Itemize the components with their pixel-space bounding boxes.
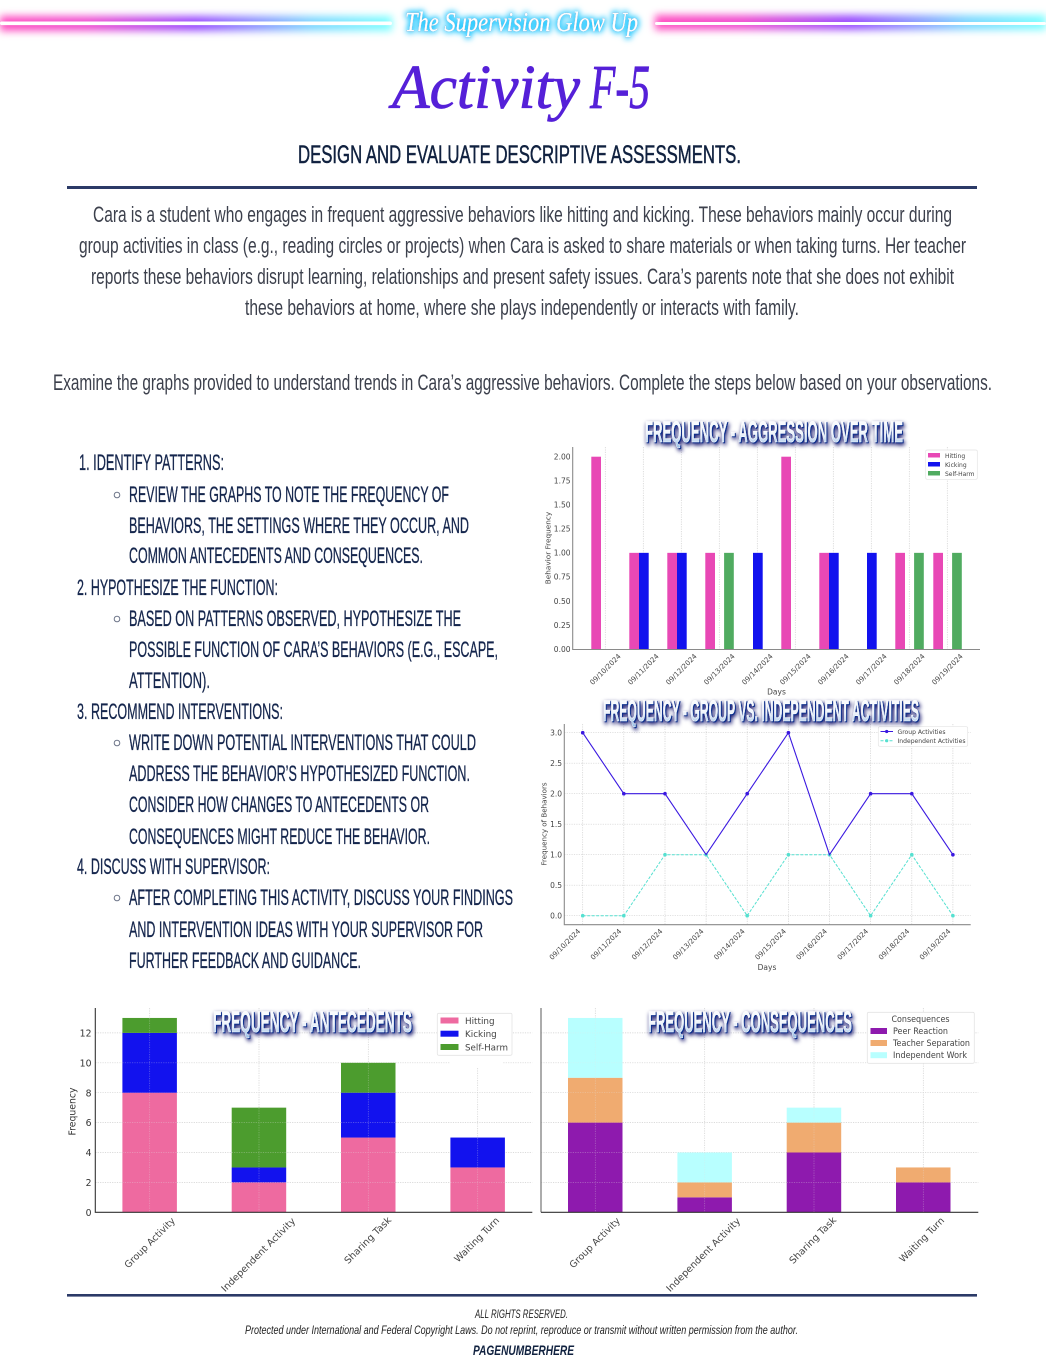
bar chart: aggression over time <box>544 416 980 696</box>
y axis labels: 1.0 <box>550 850 562 860</box>
series: independent activities <box>581 853 955 918</box>
x axis labels: 09/17/2024 <box>854 652 889 687</box>
legend: Self-Harm <box>465 1043 508 1053</box>
step 2: 2. HYPOTHESIZE THE FUNCTION: <box>77 575 278 600</box>
y axis labels: 3.0 <box>550 728 562 738</box>
x axis labels: Independent Activity <box>219 1216 298 1294</box>
rights notice: ALL RIGHTS RESERVED. <box>474 1307 568 1321</box>
scenario paragraph <box>79 202 966 320</box>
x axis labels: Sharing Task <box>787 1215 839 1267</box>
legend: Independent Activities <box>898 738 966 745</box>
legend: Independent Work <box>893 1050 967 1060</box>
y axis labels: 6 <box>86 1118 92 1129</box>
legend: Consequences <box>892 1014 950 1024</box>
bars: waiting turn <box>896 1167 950 1212</box>
x axis labels: 09/18/2024 <box>877 927 912 962</box>
step 2: ATTENTION). <box>129 668 210 693</box>
step 3: WRITE DOWN POTENTIAL INTERVENTIONS THAT COULD <box>129 730 476 755</box>
x axis labels: 09/13/2024 <box>702 652 737 687</box>
legend: Self-Harm <box>945 471 975 478</box>
bars: independent activity <box>677 1152 732 1212</box>
x axis title: Days <box>758 963 776 972</box>
legend: Hitting <box>465 1017 495 1027</box>
x axis labels: 09/12/2024 <box>664 652 699 687</box>
x axis labels: Group Activity <box>123 1215 178 1271</box>
x axis labels: Sharing Task <box>342 1215 394 1267</box>
step 4: AFTER COMPLETING THIS ACTIVITY, DISCUSS YOUR FINDINGS <box>129 885 513 910</box>
y axis labels: 2 <box>86 1178 92 1189</box>
step 4 <box>77 854 513 973</box>
scenario paragraph: these behaviors at home, where she plays independently or interacts with family. <box>245 295 799 320</box>
legend: Kicking <box>465 1030 497 1040</box>
bars: sharing task <box>341 1063 396 1212</box>
step 2: BASED ON PATTERNS OBSERVED, HYPOTHESIZE THE <box>129 606 461 631</box>
bars: sharing task <box>787 1108 841 1212</box>
y axis labels: 2.00 <box>554 452 571 462</box>
y axis labels <box>80 1028 92 1219</box>
series: group activities <box>581 731 955 856</box>
x axis labels: 09/11/2024 <box>589 927 624 962</box>
x axis labels: 09/10/2024 <box>548 927 583 962</box>
title: F-5 <box>589 54 650 122</box>
x axis labels: 09/16/2024 <box>795 927 829 962</box>
y axis labels: 0 <box>86 1208 92 1219</box>
legend: Kicking <box>945 462 967 469</box>
x axis labels: Waiting Turn <box>452 1215 502 1265</box>
step 1 <box>79 450 469 568</box>
x axis title: Days <box>767 688 786 696</box>
step 4: 4. DISCUSS WITH SUPERVISOR: <box>77 854 270 879</box>
x axis labels: 09/10/2024 <box>588 652 623 687</box>
title: Activity <box>388 54 580 122</box>
step 3: ADDRESS THE BEHAVIOR’S HYPOTHESIZED FUNCTION. <box>129 761 470 786</box>
step 4: AND INTERVENTION IDEAS WITH YOUR SUPERVISOR FOR <box>129 917 483 942</box>
x axis labels: 09/13/2024 <box>671 927 706 962</box>
legend <box>867 1012 974 1063</box>
step 1: BEHAVIORS, THE SETTINGS WHERE THEY OCCUR, AND <box>129 513 469 538</box>
x axis labels: 09/11/2024 <box>626 652 661 687</box>
legend: Hitting <box>945 453 965 460</box>
step 1: REVIEW THE GRAPHS TO NOTE THE FREQUENCY OF <box>129 482 449 507</box>
page number placeholder: PAGENUMBERHERE <box>473 1342 574 1358</box>
y axis labels: 4 <box>86 1148 92 1159</box>
top divider <box>67 186 977 189</box>
stacked bar chart: antecedents: FREQUENCY - ANTECEDENTS <box>213 1006 412 1039</box>
legend <box>437 1013 512 1055</box>
x axis labels: 09/16/2024 <box>816 652 851 687</box>
legend: Group Activities <box>898 729 946 736</box>
x axis labels <box>568 1215 947 1294</box>
y axis labels: 0.75 <box>554 573 571 582</box>
bars: independent activity <box>232 1108 286 1212</box>
right neon bar <box>655 15 1046 30</box>
legend: Teacher Separation <box>892 1038 970 1048</box>
y axis labels: 2.5 <box>550 759 562 768</box>
x axis labels: 09/17/2024 <box>836 927 870 962</box>
y axis title: Behavior Frequency <box>544 511 552 584</box>
legend <box>878 727 968 746</box>
x axis labels: 09/19/2024 <box>918 927 953 962</box>
bars: waiting turn <box>450 1138 505 1212</box>
series: kicking <box>639 553 877 649</box>
step 3: 3. RECOMMEND INTERVENTIONS: <box>77 699 283 724</box>
subtitle: DESIGN AND EVALUATE DESCRIPTIVE ASSESSMENTS. <box>298 141 741 169</box>
y axis labels: 1.25 <box>554 525 571 534</box>
steps list <box>77 450 513 973</box>
line chart: group vs independent activities <box>540 695 971 972</box>
step 3: CONSIDER HOW CHANGES TO ANTECEDENTS OR <box>129 792 429 817</box>
footer <box>245 1307 798 1358</box>
y axis labels: 0.0 <box>550 912 562 920</box>
stacked bar chart: antecedents <box>68 1006 532 1294</box>
step 3: CONSEQUENCES MIGHT REDUCE THE BEHAVIOR. <box>129 824 430 849</box>
y axis labels: 0.5 <box>550 881 562 890</box>
legend <box>926 450 977 479</box>
x axis labels: Waiting Turn <box>897 1215 947 1265</box>
x axis labels: 09/14/2024 <box>712 927 747 962</box>
y axis title: Frequency <box>68 1087 78 1136</box>
stacked bar chart: consequences <box>541 1006 978 1294</box>
y axis labels <box>550 728 562 920</box>
x axis labels: 09/19/2024 <box>930 652 965 687</box>
bars: group activity <box>568 1018 622 1212</box>
x axis labels <box>588 652 965 687</box>
step 1: 1. IDENTIFY PATTERNS: <box>79 450 224 475</box>
step 3 <box>77 699 476 849</box>
copyright notice: Protected under International and Federal Copyright Laws. Do not reprint, reproduce or transmit without written permission from the author. <box>245 1323 798 1337</box>
left neon bar <box>0 16 392 31</box>
step 2: POSSIBLE FUNCTION OF CARA’S BEHAVIORS (E.G., ESCAPE, <box>129 637 498 662</box>
step 4: FURTHER FEEDBACK AND GUIDANCE. <box>129 948 361 973</box>
x axis labels <box>123 1215 502 1294</box>
series: hitting <box>591 457 943 649</box>
x axis labels: 09/18/2024 <box>892 652 927 687</box>
brand name: The Supervision Glow Up <box>405 7 638 37</box>
y axis labels <box>554 452 571 654</box>
x axis labels: 09/15/2024 <box>754 927 788 962</box>
y axis labels: 0.00 <box>554 645 571 654</box>
y axis labels: 12 <box>80 1028 92 1040</box>
neon header banner <box>0 7 1046 37</box>
step 1: COMMON ANTECEDENTS AND CONSEQUENCES. <box>129 543 423 568</box>
y axis labels: 1.5 <box>550 820 562 829</box>
step 2 <box>77 575 498 693</box>
x axis labels <box>548 927 953 962</box>
x axis labels: 09/12/2024 <box>630 927 665 962</box>
y axis labels: 0.25 <box>554 621 571 630</box>
footer divider <box>67 1294 977 1297</box>
x axis labels: 09/14/2024 <box>740 652 775 687</box>
y axis labels: 1.75 <box>554 476 571 486</box>
y axis labels: 2.0 <box>550 790 562 798</box>
y axis title: Frequency of Behaviors <box>540 782 548 866</box>
legend: Peer Reaction <box>893 1026 948 1036</box>
series: self-harm <box>724 553 962 649</box>
y axis labels: 1.00 <box>554 549 571 558</box>
y axis labels: 1.50 <box>554 501 571 510</box>
y axis labels: 10 <box>80 1058 92 1070</box>
x axis labels: Independent Activity <box>664 1216 743 1294</box>
x axis labels: Group Activity <box>568 1215 623 1271</box>
bars: group activity <box>122 1018 177 1212</box>
y axis labels: 0.50 <box>554 597 571 606</box>
x axis labels: 09/15/2024 <box>778 652 813 687</box>
y axis labels: 8 <box>86 1088 92 1100</box>
